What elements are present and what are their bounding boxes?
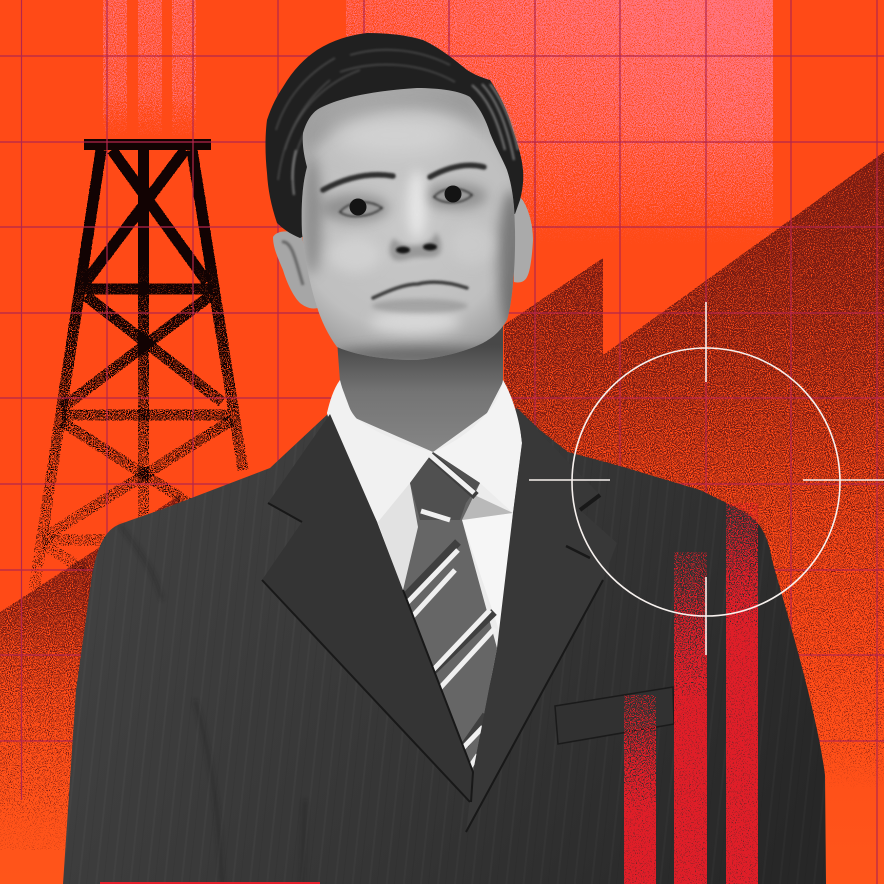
face bbox=[302, 88, 515, 360]
panel: pink grainy rectangle bbox=[346, 0, 773, 245]
crosshair target bbox=[529, 302, 884, 655]
shirt collar bbox=[327, 380, 522, 633]
suit jacket bbox=[63, 408, 826, 884]
nose bbox=[390, 232, 441, 261]
hair bbox=[266, 33, 523, 238]
necktie bbox=[403, 452, 497, 772]
panel: pink bars above derrick bbox=[103, 0, 196, 135]
hair highlights bbox=[276, 50, 455, 180]
mouth bbox=[373, 282, 467, 298]
red grainy bars bbox=[624, 503, 758, 884]
breast pocket bbox=[555, 687, 674, 744]
panel: dark red grainy shapes bbox=[0, 152, 884, 850]
left ear bbox=[273, 231, 318, 309]
jacket lapels bbox=[262, 410, 617, 832]
bottom red rule bbox=[100, 882, 320, 884]
shirt bbox=[327, 380, 522, 770]
eyebrows bbox=[323, 165, 484, 190]
face shading bbox=[302, 93, 526, 364]
neck bbox=[337, 325, 503, 452]
pinstripes bbox=[63, 408, 826, 884]
left ear fold bbox=[282, 242, 303, 285]
icon: oil derrick bbox=[34, 139, 243, 590]
grey temple streaks bbox=[293, 84, 518, 195]
right ear bbox=[512, 197, 533, 282]
arm creases bbox=[120, 525, 760, 884]
lower orange wash bbox=[0, 640, 884, 884]
eyes bbox=[340, 186, 472, 216]
